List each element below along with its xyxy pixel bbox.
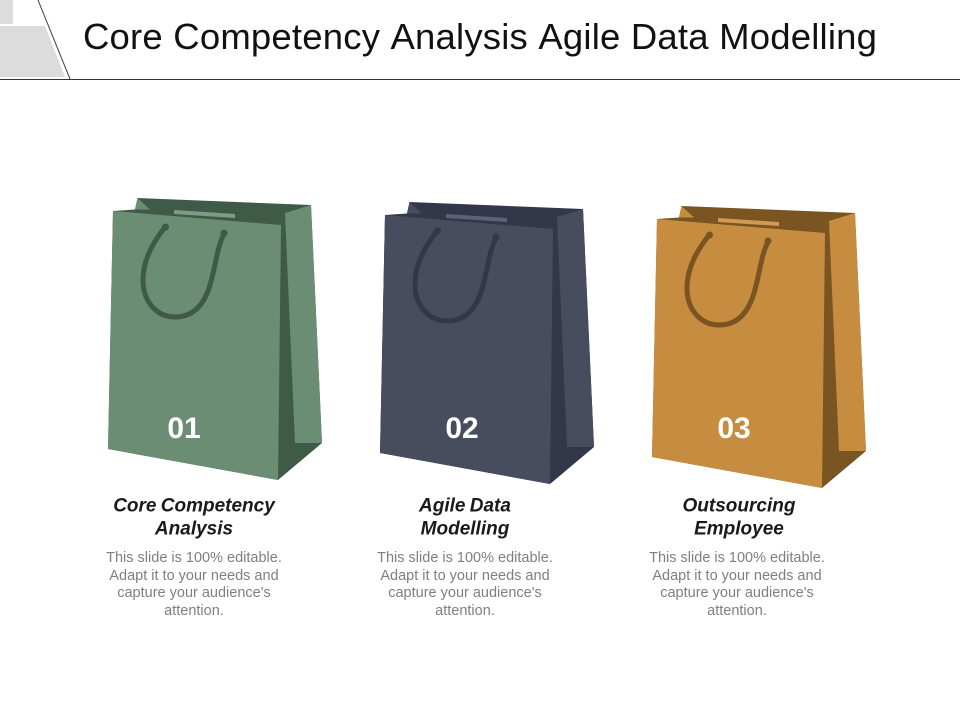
label 3: Outsourcing [683, 496, 796, 516]
number: 02 [445, 412, 479, 445]
handle [415, 231, 496, 321]
label 1: Analysis [154, 518, 233, 540]
label 2 [418, 496, 511, 540]
label 2: Modelling [421, 518, 510, 540]
title: Core Competency Analysis Agile Data Modelling [83, 16, 877, 57]
label 3 [683, 496, 796, 540]
description 2 [377, 550, 553, 619]
bag 3: orange [652, 206, 866, 488]
handle [687, 235, 768, 325]
bag 1: green [108, 198, 322, 480]
number: 01 [167, 412, 201, 445]
description 2: Adapt it to your needs and [380, 568, 550, 584]
description 3: Adapt it to your needs and [652, 568, 822, 584]
header decoration [0, 0, 70, 79]
description 3: This slide is 100% editable. [649, 550, 825, 566]
number: 03 [717, 412, 751, 445]
description 1: Adapt it to your needs and [109, 568, 279, 584]
label 2: Agile Data [418, 496, 511, 516]
description 1: capture your audience's [117, 585, 271, 601]
label 1 [113, 496, 276, 540]
label 3: Employee [694, 518, 784, 540]
bag 2: navy [380, 202, 594, 484]
description 1: attention. [164, 603, 224, 619]
header rule [0, 78, 960, 80]
description 2: This slide is 100% editable. [377, 550, 553, 566]
description 1: This slide is 100% editable. [106, 550, 282, 566]
description 2: capture your audience's [388, 585, 542, 601]
description 3: attention. [707, 603, 767, 619]
label 1: Core Competency [113, 496, 276, 516]
description 3 [649, 550, 825, 619]
description 3: capture your audience's [660, 585, 814, 601]
handle [143, 227, 224, 317]
description 1 [106, 550, 282, 619]
description 2: attention. [435, 603, 495, 619]
